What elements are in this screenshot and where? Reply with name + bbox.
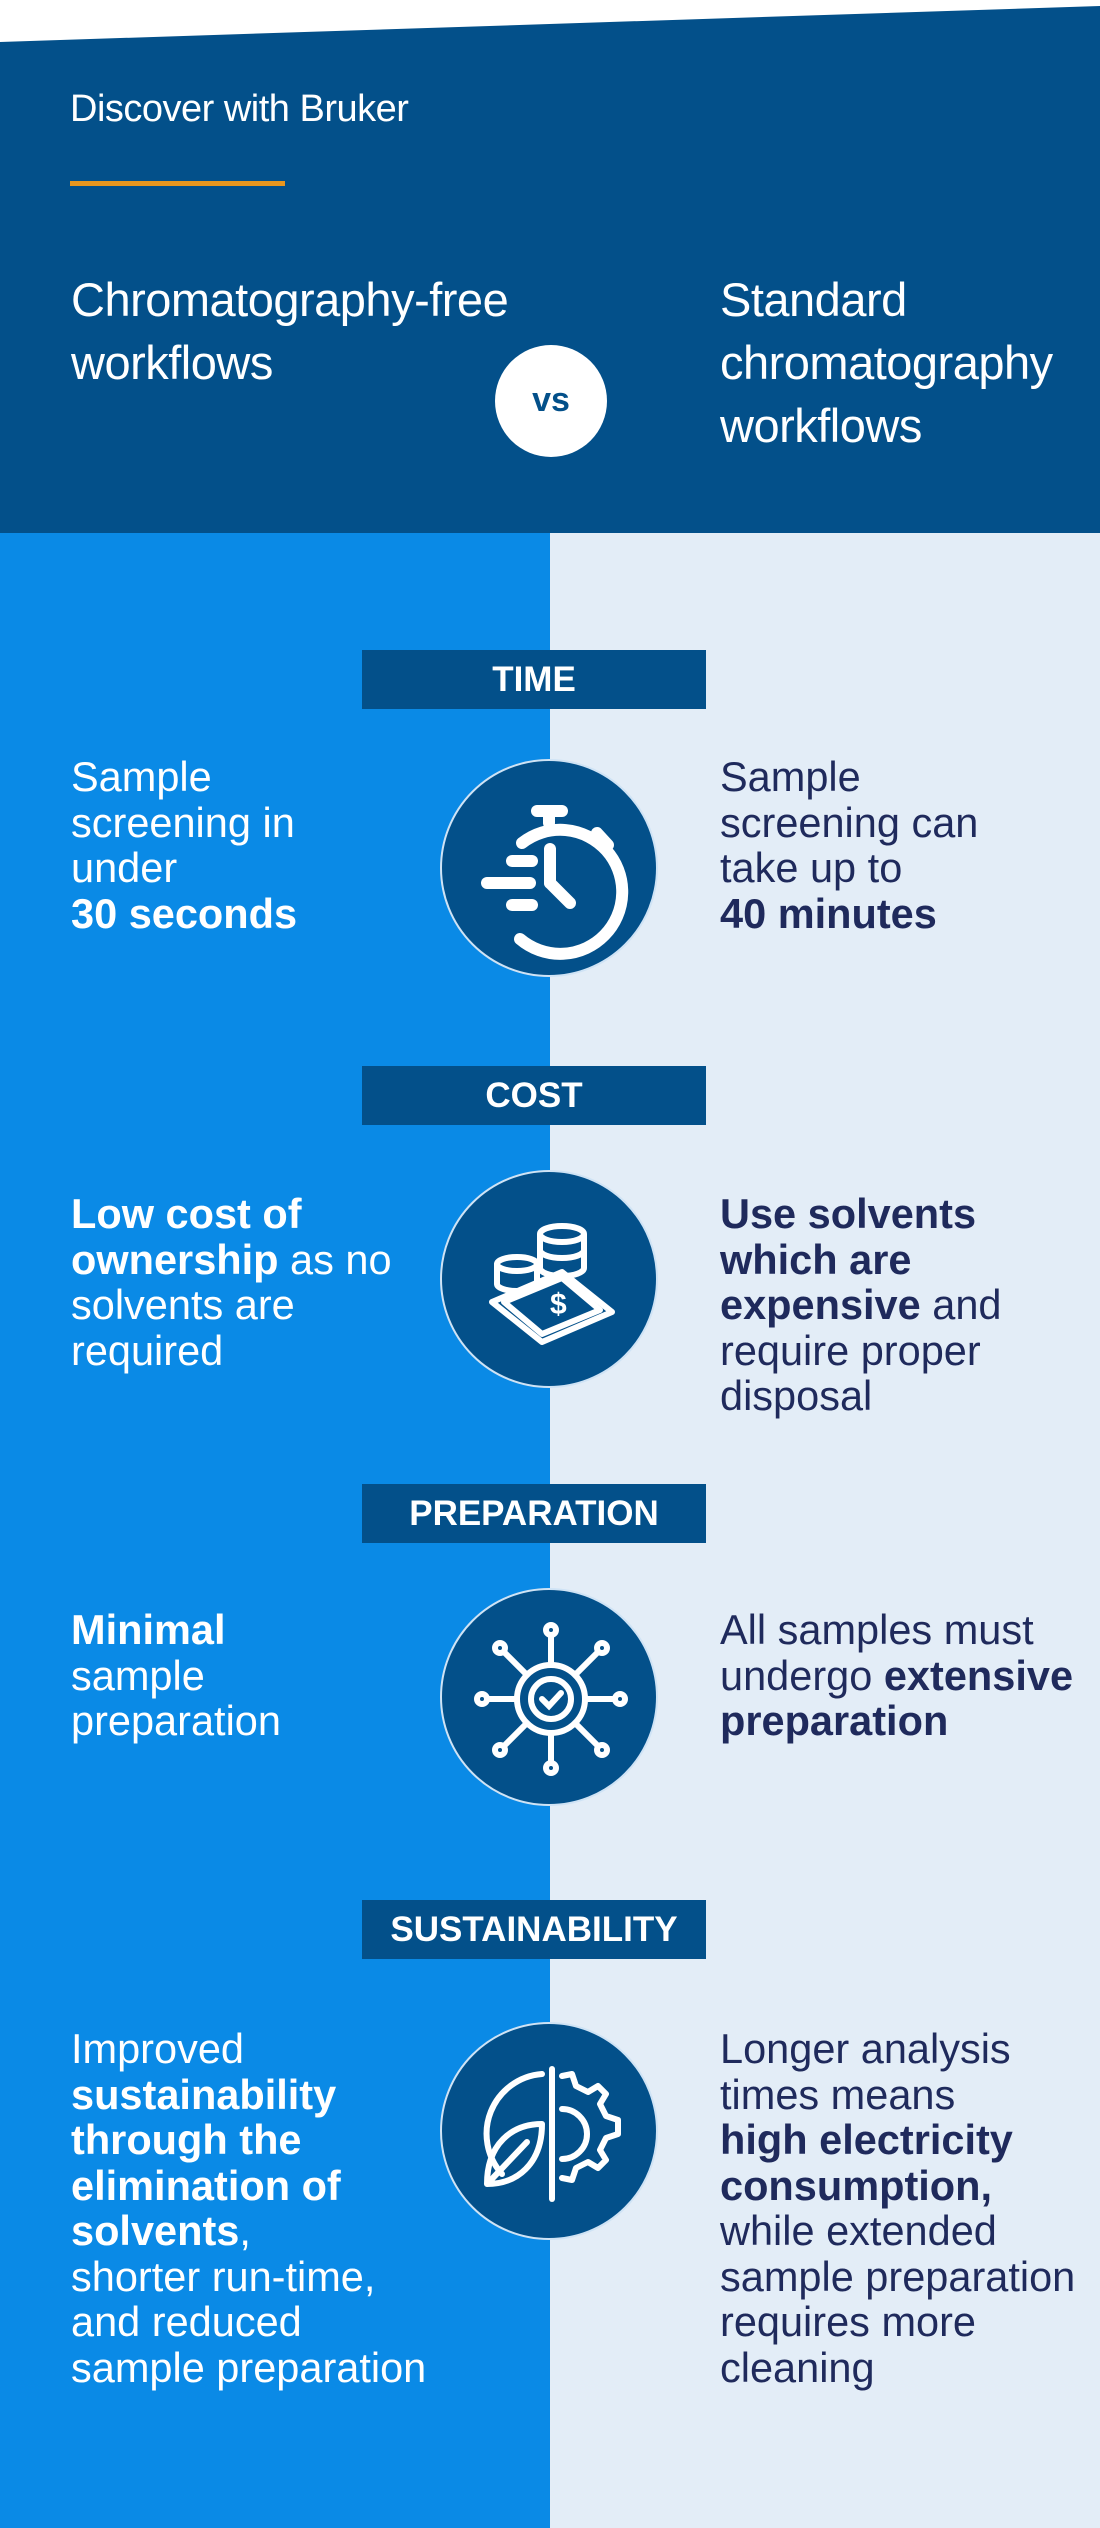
time left text: under [71,844,177,891]
sustainability right text: while extended [720,2207,997,2254]
preparation right text: undergo extensive [720,1652,1073,1698]
cost right text: expensive and [720,1281,1002,1328]
banner: cost [362,1066,706,1125]
sustainability right text: sample preparation [720,2252,1075,2300]
icon: leaf and gear [440,2022,658,2240]
sustainability right text: cleaning [720,2344,875,2390]
icon: coins and money: $ [550,1288,567,1321]
sustainability left text: shorter run-time, [71,2252,375,2300]
header subtitle: Discover with Bruker [70,88,408,130]
sustainability right text: Longer analysis [720,2025,1011,2072]
cost right text [720,1190,1002,1419]
sustainability right text [720,2025,1075,2390]
cost right text: Use solvents [720,1190,976,1237]
preparation left text: sample [71,1652,205,1698]
cost left text [71,1190,392,1374]
preparation right text: preparation [720,1697,948,1744]
right heading: chromatography [720,336,1053,389]
background right column [550,530,1100,2528]
banner: cost: COST [485,1076,583,1115]
time right text: take up to [720,844,902,891]
vs badge [495,345,607,457]
banner: time [362,650,706,709]
background left column [0,530,550,2528]
preparation left text [71,1606,281,1744]
orange divider [70,181,285,186]
time left text: screening in [71,798,295,846]
preparation left text: preparation [71,1697,281,1744]
banner: sustainability: SUSTAINABILITY [390,1910,678,1949]
sustainability right text: times means [720,2070,955,2118]
icon: coins and money [440,1170,658,1388]
sustainability left text: elimination of [71,2162,341,2208]
right heading [720,273,1053,452]
cost left text: ownership as no [71,1236,392,1282]
preparation right text: All samples must [720,1606,1034,1653]
right heading: workflows [720,399,922,452]
sustainability right text: high electricity [720,2116,1013,2163]
preparation left text: Minimal [71,1606,226,1653]
time left text: Sample [71,753,212,800]
sustainability right text: requires more [720,2298,976,2345]
time right text: screening can [720,798,978,846]
banner: time: TIME [492,660,576,699]
icon: stopwatch [440,759,658,977]
icon: gear with check [440,1588,658,1806]
cost left text: solvents are [71,1281,295,1328]
sustainability left text: Improved [71,2025,244,2072]
left heading: workflows [71,336,273,389]
banner: preparation [362,1484,706,1543]
sustainability left text: sustainability [71,2070,336,2118]
cost right text: require proper [720,1326,981,1374]
time left text: 30 seconds [71,890,297,936]
right heading: Standard [720,273,907,326]
sustainability left text: and reduced [71,2298,302,2345]
banner: preparation: PREPARATION [409,1494,659,1533]
left heading: Chromatography-free [71,273,508,326]
cost left text: required [71,1326,223,1374]
preparation right text [720,1606,1073,1744]
sustainability left text: through the [71,2116,302,2163]
cost right text: which are [720,1236,911,1282]
sustainability right text: consumption, [720,2162,992,2208]
header panel [0,6,1100,533]
sustainability left text: solvents, [71,2207,251,2254]
cost right text: disposal [720,1372,872,1419]
time right text [720,753,978,936]
time right text: 40 minutes [720,890,937,936]
banner: sustainability [362,1900,706,1959]
vs badge: vs [532,381,570,419]
time left text [71,753,297,936]
sustainability left text [71,2025,426,2390]
left heading [70,273,508,389]
cost left text: Low cost of [71,1190,302,1237]
time right text: Sample [720,753,861,800]
sustainability left text: sample preparation [71,2344,426,2390]
